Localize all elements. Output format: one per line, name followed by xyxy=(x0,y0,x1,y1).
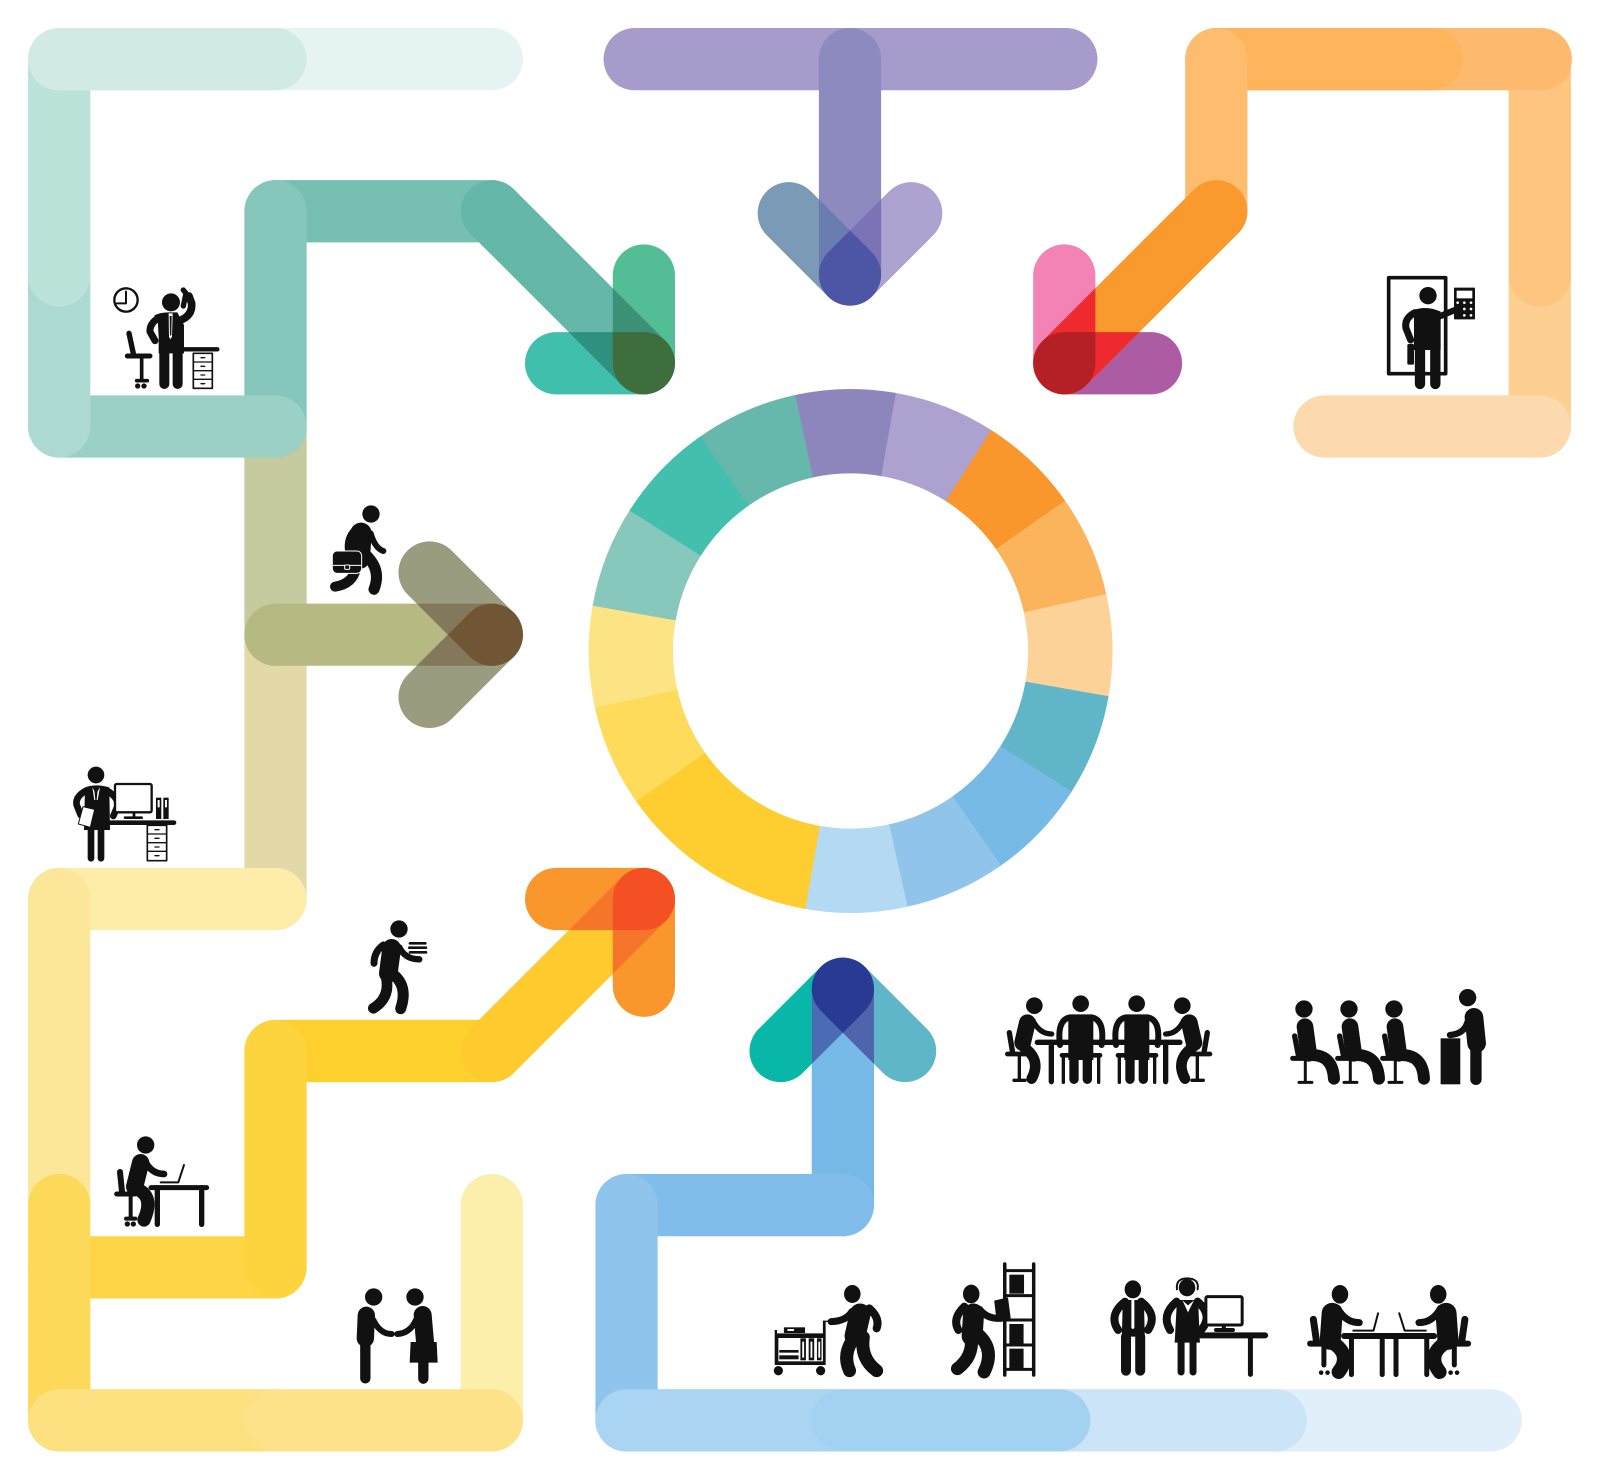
path: pale yellow outer band xyxy=(59,899,492,1420)
path: olive arrow xyxy=(276,572,492,697)
standing person at lectern xyxy=(1441,989,1477,1084)
icon: person working on laptop at table xyxy=(117,1136,207,1227)
path: purple T arrow xyxy=(635,59,1066,274)
icon group: meeting around a table xyxy=(1007,995,1210,1082)
icon group: bottom row of office workers xyxy=(774,1264,1468,1375)
seated person three xyxy=(1383,1000,1424,1082)
path: yellow arrow to ring xyxy=(276,899,644,1267)
icon: two people with laptops at shared table xyxy=(1310,1285,1468,1375)
path: olive vertical band xyxy=(245,427,306,899)
central colour ring xyxy=(545,345,1157,957)
icon group: three people waiting and a person at a lectern xyxy=(1293,989,1477,1084)
seated person one xyxy=(1293,1000,1334,1082)
icon: person pushing file cart xyxy=(774,1285,878,1375)
meeting person left xyxy=(1007,997,1052,1080)
icon: man and woman with headset at computer desk xyxy=(1114,1278,1265,1374)
icon: person filing on bookshelf xyxy=(956,1264,1034,1375)
path: teal arrow to ring xyxy=(276,211,644,427)
icon: person at door with keypad xyxy=(1389,278,1475,384)
meeting person right xyxy=(1166,997,1210,1080)
icon: businessman on phone at desk with clock xyxy=(114,288,217,389)
path: pale teal outer band xyxy=(59,59,492,427)
path: blue band and arrow xyxy=(627,989,1491,1420)
icon: walking commuter with briefcase xyxy=(332,505,383,589)
icon: woman with documents at computer desk xyxy=(76,767,174,861)
meeting person centre two xyxy=(1115,995,1158,1082)
icon: handshake between two people xyxy=(365,1288,438,1379)
icon: person carrying books xyxy=(373,920,426,1009)
path: orange outer band and arrow xyxy=(1064,59,1541,427)
meeting person centre one xyxy=(1059,995,1102,1082)
seated person two xyxy=(1338,1000,1379,1082)
